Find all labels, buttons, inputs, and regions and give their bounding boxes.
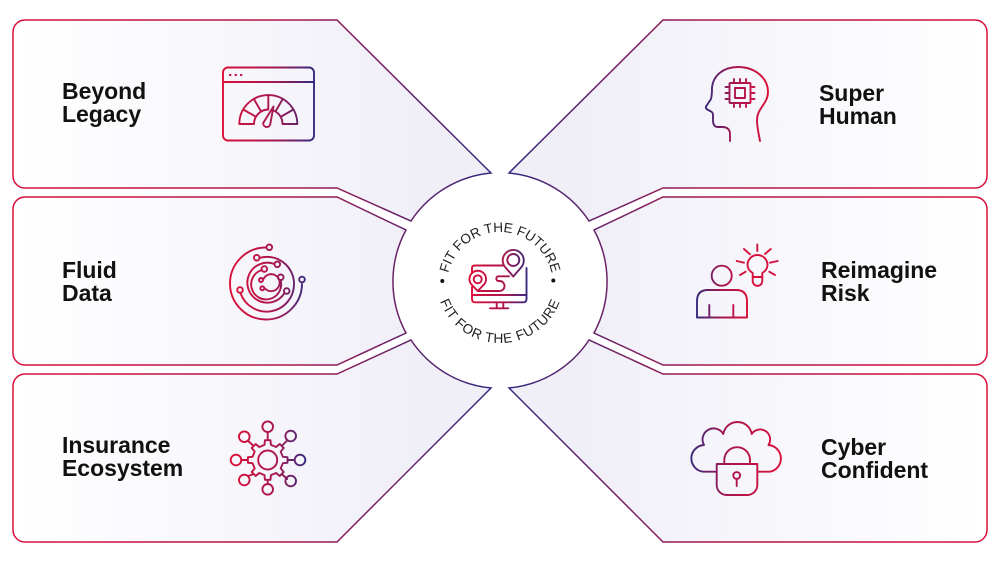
icon: cloud with padlock — [691, 422, 781, 495]
heading: Cyber Confident: Cyber — [821, 434, 886, 460]
panel: Cyber Confident — [509, 340, 987, 542]
heading: Insurance Ecosystem: Ecosystem — [62, 455, 183, 481]
heading: Beyond Legacy: Legacy — [62, 101, 141, 127]
center ring text: bottom: FIT FOR THE FUTURE — [440, 298, 560, 343]
panel: Beyond Legacy — [13, 20, 491, 221]
center ring text: top: FIT FOR THE FUTURE — [440, 222, 560, 273]
heading: Super Human: Human — [819, 103, 897, 129]
heading: Insurance Ecosystem: Insurance — [62, 432, 170, 458]
icon: concentric data circuit — [230, 244, 305, 320]
icon: gear network — [231, 421, 305, 495]
icon: browser window with speedometer — [223, 68, 314, 140]
icon: bulb rays — [737, 244, 778, 286]
heading: Cyber Confident: Confident — [821, 457, 928, 483]
panel: Insurance Ecosystem — [13, 340, 491, 542]
panel: Fluid Data — [13, 197, 406, 365]
heading: Reimagine Risk: Risk — [821, 280, 870, 306]
bullet: left — [440, 279, 444, 283]
icon: head with chip — [706, 67, 768, 141]
heading: Reimagine Risk: Reimagine — [821, 257, 937, 283]
heading: Super Human: Super — [819, 80, 884, 106]
heading: Beyond Legacy: Beyond — [62, 78, 146, 104]
heading: Fluid Data: Fluid — [62, 257, 117, 283]
bullet: right — [551, 278, 555, 282]
icon: monitor with map pins — [469, 250, 526, 308]
panel: Super Human — [509, 20, 987, 221]
heading: Fluid Data: Data — [62, 280, 112, 306]
panel: Reimagine Risk — [594, 197, 987, 365]
icon: person with light bulb — [697, 266, 747, 318]
